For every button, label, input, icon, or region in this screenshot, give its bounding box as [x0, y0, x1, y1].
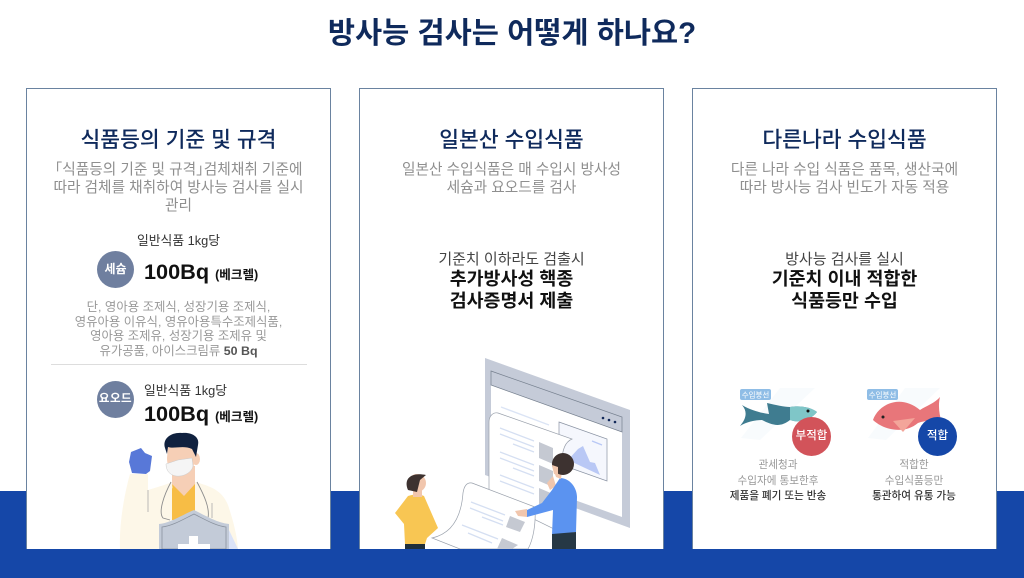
heading: food standards: 식품등의 기준 및 규격 — [81, 128, 276, 152]
emphasis: only compliant foods imported: 식품등만 수입 — [791, 290, 898, 311]
badge: not compliant: 부적합 — [796, 430, 827, 442]
badge: cesium: 세슘 — [104, 262, 127, 276]
text: additional test condition: 기준치 이하라도 검출시 — [438, 251, 585, 268]
description: other country imports: 다른 나라 수입 식품은 품목, 생산국에 — [731, 162, 958, 178]
description: food standards: 따라 검체를 채취하여 방사능 검사를 실시 — [53, 180, 304, 196]
emphasis: additional requirement: 추가방사성 핵종 — [450, 268, 573, 289]
heading: other country imports: 다른나라 수입식품 — [762, 128, 927, 152]
description: other country imports — [731, 162, 958, 196]
description: other country imports: 따라 방사능 검사 빈도가 자동 적용 — [740, 180, 949, 196]
emphasis: additional requirement — [450, 268, 573, 311]
badge: cesium — [97, 251, 134, 288]
illustration: approved red fish — [867, 389, 940, 432]
panel: Japanese imports — [359, 88, 664, 549]
label: general food per kg: 일반식품 1kg당 — [137, 233, 220, 248]
description: food standards: 「식품등의 기준 및 규격」검체채취 기준에 — [48, 162, 302, 178]
illustration: rejected blue fish: 수입붕선 — [742, 390, 769, 400]
badge: compliant — [918, 417, 957, 456]
text: radiation test performed: 방사능 검사를 실시 — [785, 251, 904, 268]
title: 방사능 검사는 어떻게 하나요? — [328, 17, 696, 50]
description: Japanese imports: 세슘과 요오드를 검사 — [447, 180, 576, 196]
emphasis: additional requirement: 검사증명서 제출 — [450, 290, 573, 311]
text: infant food limits: 영아용 조제유, 성장기용 조제유 및 — [90, 329, 267, 343]
illustration: rejected blue fish — [740, 389, 817, 426]
caption: not compliant — [730, 458, 826, 502]
caption: not compliant: 수입자에 통보한후 — [738, 474, 818, 486]
caption: compliant: 적합한 — [899, 459, 929, 471]
text: infant food limits: 영유아용 이유식, 영유아용특수조제식품, — [75, 314, 282, 328]
value: cesium limit: 100Bq (베크렐) — [144, 259, 258, 284]
heading: Japanese imports: 일본산 수입식품 — [439, 128, 584, 152]
badge: iodine — [97, 381, 134, 418]
caption: not compliant: 관세청과 — [758, 459, 798, 471]
badge: compliant: 적합 — [927, 430, 948, 442]
caption: compliant: 수입식품등만 — [885, 474, 943, 486]
illustration: approved red fish: 수입붕선 — [869, 390, 896, 400]
value: iodine limit: 100Bq (베크렐) — [144, 401, 258, 426]
illustration: two people reviewing documents — [395, 358, 630, 549]
badge: iodine: 요오드 — [99, 393, 132, 405]
caption: compliant: 통관하여 유통 가능 — [872, 490, 956, 502]
text: infant food limits: 단, 영아용 조제식, 성장기용 조제식, — [87, 300, 270, 314]
emphasis: only compliant foods imported: 기준치 이내 적합한 — [772, 268, 917, 289]
text: infant food limits — [75, 300, 282, 358]
description: food standards — [48, 162, 304, 214]
description: Japanese imports — [402, 162, 621, 196]
label: general food per kg, iodine: 일반식품 1kg당 — [144, 383, 227, 398]
description: food standards: 관리 — [165, 198, 192, 214]
panel: food standards — [26, 88, 331, 549]
badge: not compliant — [792, 417, 831, 456]
illustration: masked doctor with shield — [120, 432, 238, 549]
description: Japanese imports: 일본산 수입식품은 매 수입시 방사성 — [402, 162, 621, 178]
caption: compliant — [872, 458, 956, 502]
text: infant food limits: 유가공품, 아이스크림류 50 Bq — [99, 344, 258, 358]
emphasis: only compliant foods imported — [772, 268, 917, 311]
blue band — [0, 491, 1024, 578]
panel: other country imports — [692, 88, 997, 549]
caption: not compliant: 제품을 폐기 또는 반송 — [730, 490, 826, 502]
